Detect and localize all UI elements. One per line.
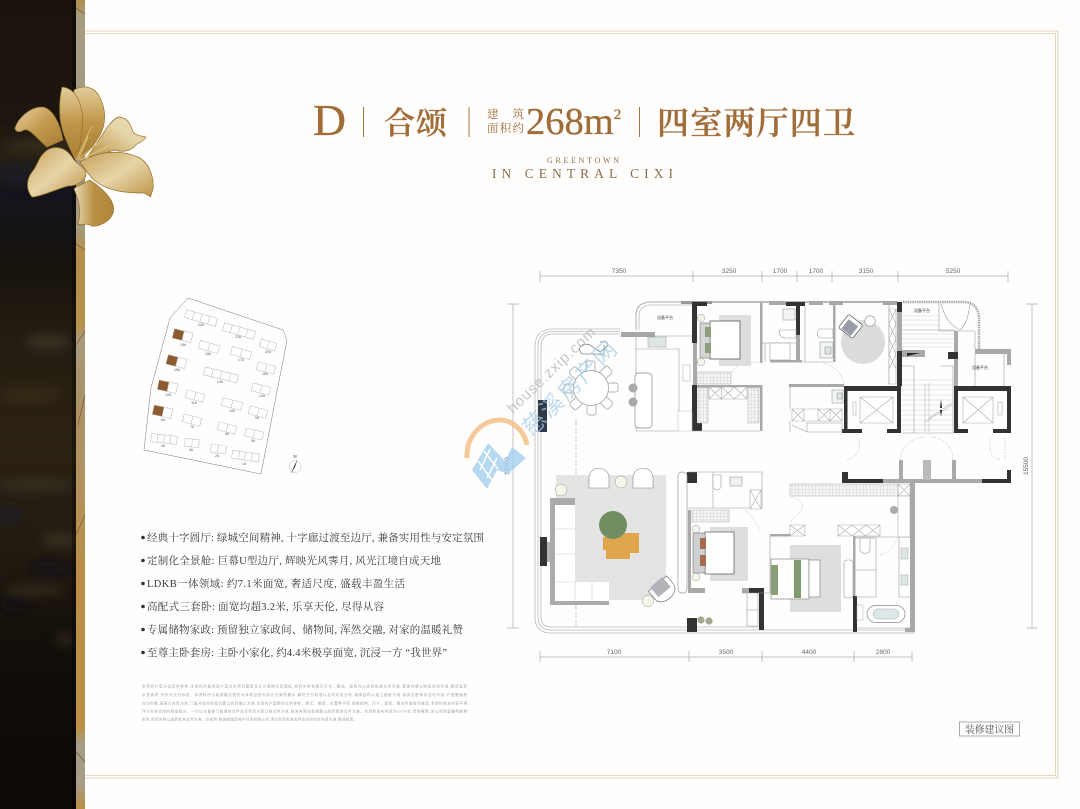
- building numbers: 12#: [165, 393, 172, 397]
- petal top front: [60, 87, 83, 162]
- top dimension line: 1700: [809, 268, 824, 275]
- structural dark walls: [538, 302, 1011, 632]
- coffee rug: [603, 533, 639, 559]
- bottom dimension line: 3500: [719, 649, 734, 656]
- bottom dimension line: [540, 649, 912, 662]
- bathrooms upper: [770, 309, 843, 403]
- building numbers: 4#: [161, 444, 166, 448]
- left dimension line: 15500: [504, 457, 511, 475]
- building numbers: 1#: [242, 462, 247, 466]
- round table: [599, 511, 627, 539]
- disclaimer: 均为约数,层高以实际为准,门窗开启方向及位置以实际施工为准,本资料户型朝向仅供参考。单元、楼层、位置等不同,局部结构、尺寸、面积、朝向可能有所差异,本资料相关内容不得: [142, 700, 468, 706]
- plants: [697, 616, 713, 625]
- study with rug and armchair: [838, 314, 885, 364]
- bullets: [141, 536, 145, 654]
- feature list: 经典十字圆厅: 绿城空间精神, 十字廊过渡至边厅, 兼备实用性与安定氛围: [147, 531, 484, 544]
- building numbers: [161, 323, 272, 466]
- subtitle: GREENTOWN: [547, 156, 619, 165]
- watermark url: house.zxip.com: [504, 324, 599, 417]
- disclaimer: [142, 684, 468, 722]
- balcony rails: [535, 302, 915, 633]
- stamp: decoration suggestion: 装修建议图: [965, 723, 1014, 736]
- disclaimer: 权利,项目名称以政府批准文件为准。开发商:慈溪绿城房地产开发有限公司,请以实际批准文件及合同约定内容为准,敬请知悉。: [142, 716, 357, 722]
- site boundary: [144, 298, 287, 474]
- top dimension line: 3150: [859, 268, 874, 275]
- icon: golden lily: [15, 87, 153, 226]
- left dark marble band: [0, 0, 78, 809]
- building numbers: 18#: [205, 352, 212, 356]
- unit letter: D: [313, 96, 346, 145]
- building numbers: 17#: [238, 358, 245, 362]
- building numbers: 16#: [262, 372, 269, 376]
- site plan: [144, 298, 301, 474]
- subtitle: [492, 156, 674, 181]
- watermark name: 慈溪房产网: [517, 336, 622, 441]
- bottom dimension line: 7100: [607, 649, 622, 656]
- master bedroom: [771, 545, 863, 620]
- building numbers: 6#: [225, 432, 230, 436]
- building numbers: 9#: [255, 416, 260, 420]
- stair arrows: [907, 353, 942, 417]
- door arcs: [732, 343, 1005, 555]
- petal top back: [72, 87, 105, 160]
- building numbers: 10#: [229, 409, 236, 413]
- area value: 268m: [526, 101, 614, 143]
- petal right big: [80, 152, 153, 197]
- top dimension line: 7350: [612, 268, 627, 275]
- petal lower left: [28, 148, 86, 197]
- stamens: [76, 126, 118, 160]
- building numbers: 14#: [217, 380, 224, 384]
- building numbers: 20#: [265, 350, 272, 354]
- wardrobes hatched: [692, 372, 898, 522]
- top dimension line: 1700: [773, 268, 788, 275]
- disclaimer: 本项目户型方位仅供参考,本资料所载项目户型为本项目建筑设计方案的示意图纸,资料中所有图示尺寸、朝向、面积均以政府批准文件为准,具体详情以购房合同为准,敬请留意: [142, 684, 468, 688]
- disclaimer: 示意参考,不作为交付标准。本资料所示装修建议图仅为本项目室内设计方案的展示,最终交付标准以合同约定为准,墙体结构以竣工图纸为准,家具及配饰非交付内容,户型图面积: [142, 692, 467, 697]
- gray wall segments: [621, 301, 1011, 632]
- building numbers: 2#: [215, 454, 220, 458]
- platform labels: 设备平台: [657, 314, 673, 320]
- disclaimer: 作为买卖合同的组成部分。一切以主管部门批准的文件及买卖双方签订的文件为准,相关内容如有调整以政府批准文件为准。本资料发布时间为2024年,若有更新,本公司保留最终解释: [142, 708, 467, 714]
- icon: north compass: N: [293, 454, 297, 459]
- title: [313, 96, 855, 145]
- gold marble strip: [76, 0, 85, 809]
- bottom dimension line: 4400: [802, 649, 817, 656]
- building numbers: 8#: [161, 418, 166, 422]
- highlighted D units: [152, 329, 193, 418]
- feature list: LDKB一体领域: 约7.1米面宽, 奢适尺度, 盛载丰盈生活: [147, 577, 406, 590]
- dimensions: [504, 268, 1038, 662]
- bedroom two: [678, 472, 748, 593]
- area caption: 面积约: [487, 121, 524, 135]
- room outlines: [620, 302, 1004, 633]
- building numbers: 5#: [251, 439, 256, 443]
- living room: [550, 468, 679, 607]
- feature list: 高配式三套卧: 面宽均超3.2米, 乐享天伦, 尽得从容: [147, 600, 384, 613]
- feature list: 至尊主卧套房: 主卧小家化, 约4.4米极享面宽, 沉浸一方 “我世界”: [147, 646, 447, 659]
- watermark: [467, 324, 622, 489]
- separators: [364, 107, 640, 137]
- logo arc: [467, 420, 527, 458]
- icon: north compass: [289, 454, 301, 474]
- building numbers: 3#: [189, 448, 194, 452]
- stair treads: [902, 316, 955, 432]
- buildings: [151, 310, 277, 462]
- area caption: [487, 107, 524, 135]
- X boxes: storage and lift shafts: [709, 309, 1002, 536]
- dining table with chairs: [564, 361, 618, 415]
- sofa: [550, 498, 609, 605]
- petal left: [15, 107, 63, 147]
- building numbers: 13#: [259, 394, 266, 398]
- floor plan: [535, 301, 1011, 633]
- building numbers: 15#: [174, 368, 181, 372]
- master bath: [860, 496, 910, 622]
- right dimension line: 15500: [1023, 457, 1030, 475]
- platform labels: [657, 307, 988, 370]
- bath lower left: [713, 475, 742, 490]
- top dimension line: [540, 268, 1008, 282]
- stamp: decoration suggestion: [960, 722, 1020, 736]
- name: 合颂: [384, 106, 448, 141]
- rooftop rail right: [903, 302, 979, 349]
- bottom dimension line: 2800: [876, 649, 891, 656]
- feature list: 定制化全景舱: 巨幕U型边厅, 辉映光风霁月, 风光江境自成天地: [147, 554, 442, 567]
- area value: 2: [614, 107, 621, 123]
- building numbers: 19#: [180, 343, 187, 347]
- left dimension line: [504, 304, 519, 628]
- top dimension line: 3250: [722, 268, 737, 275]
- petal right upper: [88, 117, 146, 158]
- platform labels: 设备平台: [972, 364, 988, 370]
- right dimension line: [1023, 304, 1038, 628]
- layout: 四室两厅四卫: [657, 105, 855, 141]
- logo building: [472, 443, 526, 489]
- feature list: [141, 531, 484, 659]
- building numbers: 22#: [198, 323, 205, 327]
- bedroom one: [697, 314, 751, 366]
- kitchen and dining: [580, 337, 692, 431]
- feature list: 专属储物家政: 预留独立家政间、储物间, 浑然交融, 对家的温暖礼赞: [147, 623, 464, 636]
- top dimension line: 5250: [946, 268, 961, 275]
- platform labels: 设备平台: [914, 307, 930, 313]
- petal bottom: [74, 180, 114, 226]
- building numbers: 7#: [190, 425, 195, 429]
- area caption: 建 筑: [487, 107, 524, 121]
- subtitle: IN CENTRAL CIXI: [492, 166, 674, 181]
- armchair: [647, 574, 679, 606]
- building numbers: 11#: [191, 401, 198, 405]
- building numbers: 21#: [235, 335, 242, 339]
